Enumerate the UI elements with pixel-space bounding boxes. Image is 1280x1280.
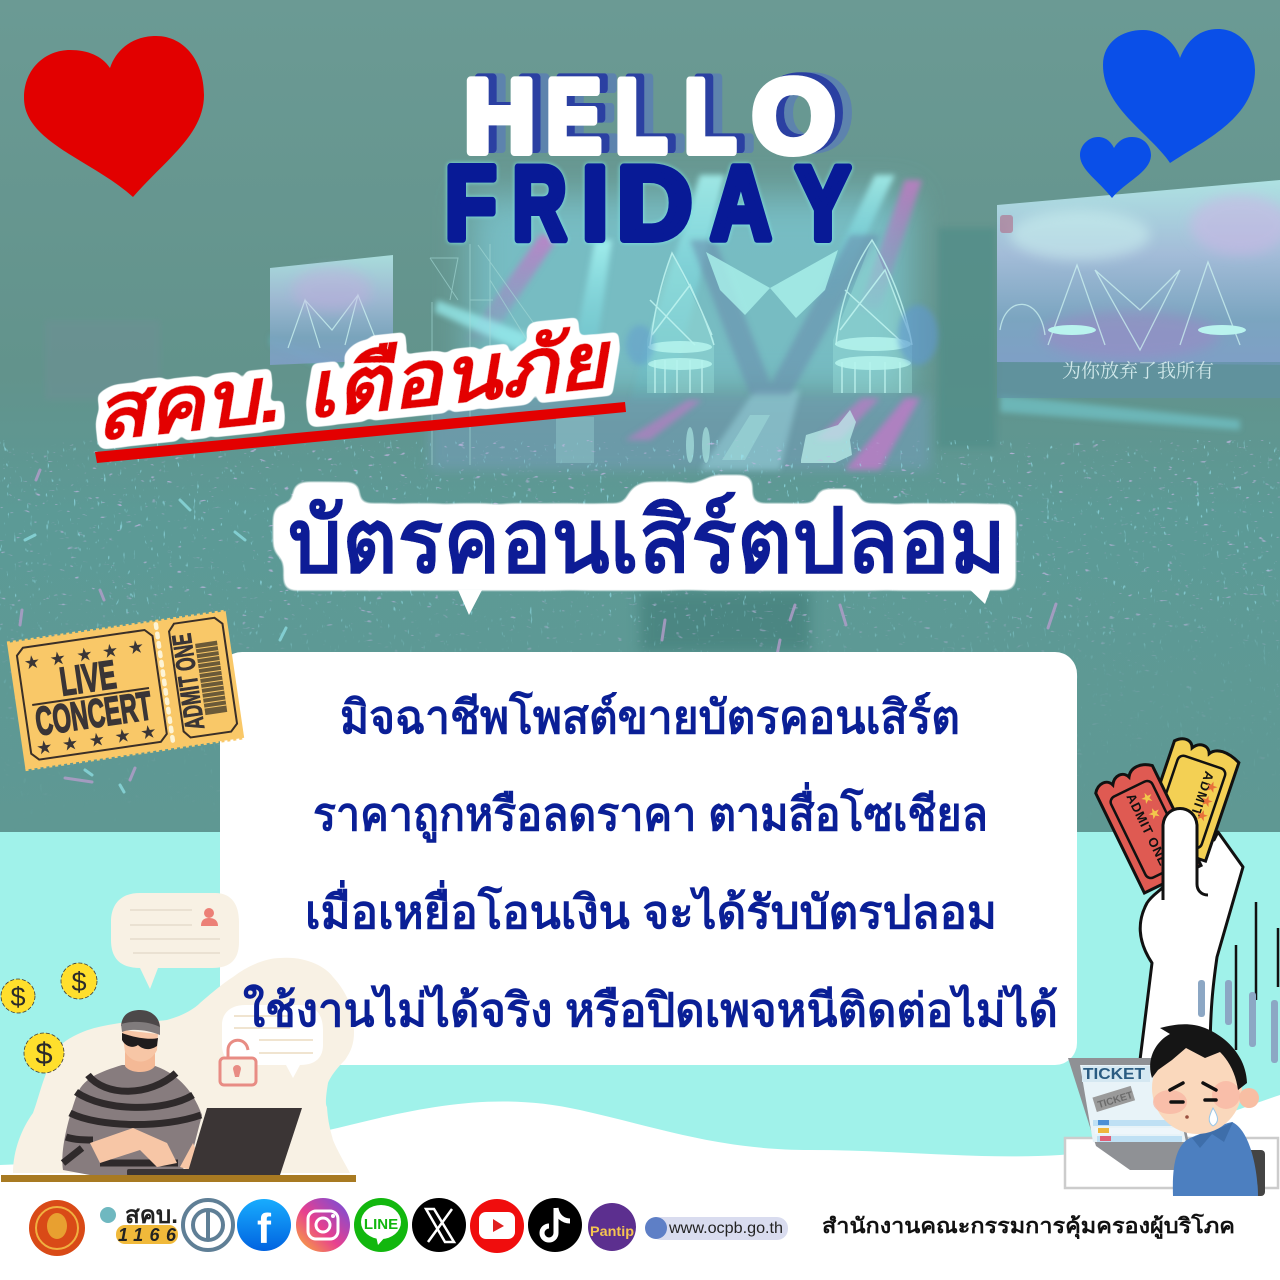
illustration: sad person with ticket laptop — [1065, 1024, 1278, 1196]
icon: live concert ticket: CONCERT — [33, 684, 155, 744]
dark column right of stage — [938, 228, 996, 448]
face — [122, 1030, 158, 1062]
icon: live concert ticket: ★ — [140, 724, 157, 743]
stage light beams — [270, 175, 1240, 470]
HELLO far shadow: E — [563, 55, 618, 171]
icon: facebook: f — [257, 1205, 272, 1252]
HELLO letters: E — [546, 58, 601, 174]
HELLO near shadow: E — [554, 55, 609, 171]
HELLO near shadow: L — [692, 56, 744, 172]
logo: hotline: 1166 — [118, 1225, 177, 1245]
HELLO near shadow: H — [472, 56, 543, 172]
icon: facebook — [237, 1199, 291, 1252]
drip bars — [1198, 980, 1278, 1063]
speech bubble: white — [222, 1005, 323, 1078]
FRIDAY letters: D — [617, 146, 692, 262]
logo: OCPB ring — [183, 1200, 233, 1250]
FRIDAY letters: A — [710, 146, 771, 262]
icon: live concert ticket: ★ — [76, 646, 93, 665]
icon: dollar coins: $ — [35, 1036, 53, 1071]
icon: live concert ticket: ★ — [102, 642, 119, 661]
panel: concert photo background — [0, 0, 1280, 832]
heading: บัตรคอนเสิร์ตปลอม: บัตรคอนเสิร์ตปลอม — [288, 491, 1006, 592]
illustration: thief at laptop — [1, 893, 356, 1182]
laptop: TICKET — [1083, 1066, 1145, 1083]
panel: main message card — [220, 652, 1077, 1065]
website pill — [645, 1217, 788, 1240]
yellow ticket: ADMIT — [1188, 769, 1217, 818]
stage blue blob accent — [898, 305, 938, 365]
icon: pantip — [588, 1203, 636, 1251]
illustration: hand holding tickets — [1093, 736, 1278, 1063]
icon: live concert ticket: ★ — [88, 731, 106, 750]
HELLO letters: O — [752, 58, 835, 175]
HELLO near shadow: L — [623, 56, 675, 172]
icon: live concert ticket: ADMIT ONE — [167, 632, 210, 732]
red ticket: ★ — [1146, 805, 1163, 822]
falling lines — [1236, 902, 1278, 1050]
FRIDAY letters: F — [445, 146, 496, 262]
speech bubble: user card — [111, 893, 239, 989]
HELLO letters: L — [684, 59, 736, 175]
beanie — [121, 1010, 160, 1028]
faint upper-left stage panel — [45, 320, 160, 400]
footer: logos row — [29, 1198, 788, 1256]
yellow ticket — [1141, 736, 1241, 861]
right big screen — [997, 180, 1280, 398]
HELLO far shadow: L — [632, 56, 684, 172]
line 3: เมื่อเหยื่อโอนเงิน จะได้รับบัตรปลอม — [305, 880, 997, 938]
red underline — [95, 402, 626, 463]
icon: live concert ticket: ★ — [36, 739, 53, 758]
crowd sparkle — [0, 440, 1280, 759]
right screen lyric caption: 为你放弃了我所有 — [1062, 356, 1214, 383]
HELLO far shadow: O — [769, 55, 852, 172]
icon: live concert ticket: ★ — [114, 727, 131, 746]
icon: dollar coins: $ — [71, 967, 87, 997]
main message text — [243, 690, 1058, 1036]
arm — [90, 1128, 177, 1167]
icon: open padlock — [220, 1040, 256, 1085]
hair — [1150, 1024, 1247, 1090]
HELLO letters — [464, 58, 835, 175]
piano — [801, 410, 856, 463]
laptop — [1068, 1058, 1195, 1170]
HELLO letters: L — [615, 59, 667, 175]
icon: blue hearts — [1080, 29, 1255, 198]
HELLO near shadow: O — [760, 55, 843, 172]
stage floor props: cage, performers, stairs — [556, 415, 770, 463]
website pill: www.ocpb.go.th — [668, 1220, 783, 1237]
icon: live concert ticket: ★ — [127, 638, 145, 657]
dark crowd silhouettes — [640, 590, 810, 652]
footer: agency name: สำนักงานคณะกรรมการคุ้มครองผู้บริโภค — [822, 1213, 1235, 1240]
logo: hotline: สคบ. — [125, 1202, 178, 1229]
stage disc lights — [648, 337, 911, 370]
FRIDAY letters: R — [512, 146, 567, 262]
icon: youtube — [470, 1199, 524, 1253]
cheeks — [1153, 1090, 1187, 1114]
desk — [1065, 1138, 1278, 1188]
yellow ticket: ★ — [1199, 793, 1215, 810]
FRIDAY letters: Y — [796, 145, 850, 261]
logo: government emblem — [29, 1200, 85, 1256]
FRIDAY letters — [445, 144, 850, 262]
red ticket: ★ — [1139, 789, 1156, 807]
logo: hotline — [100, 1202, 178, 1245]
stage dark V pillars — [690, 235, 880, 395]
head — [1152, 1042, 1242, 1134]
neck — [125, 1048, 155, 1072]
red ticket — [1093, 760, 1201, 893]
icon: red heart — [24, 36, 204, 197]
white finger — [1163, 808, 1208, 900]
stage lattice set pieces — [647, 240, 912, 393]
left big screen — [270, 255, 393, 365]
icon: live concert ticket: ★ — [62, 735, 79, 754]
HELLO far shadow — [481, 55, 852, 172]
HELLO far shadow: H — [481, 56, 552, 172]
line 1: มิจฉาชีพโพสต์ขายบัตรคอนเสิร์ต — [340, 690, 960, 743]
icon: pantip: Pantip — [590, 1223, 634, 1239]
icon: tiktok — [528, 1198, 582, 1252]
red ticket: ADMIT ONE — [1123, 791, 1171, 868]
white hand palm — [1140, 832, 1243, 1060]
HELLO letters: H — [464, 59, 535, 175]
icon: live concert ticket: ★ — [24, 654, 41, 673]
chair back — [1245, 1150, 1265, 1196]
icon: dollar coins — [1, 963, 97, 1073]
shirt — [1173, 1122, 1258, 1196]
icon: instagram — [296, 1198, 350, 1252]
icon: live concert ticket — [7, 611, 244, 770]
yellow ticket: ★ — [1204, 779, 1220, 796]
heading: สคบ. เตือนภัย warning: สคบ. เตือนภัย — [90, 315, 618, 457]
thief body — [62, 1010, 202, 1175]
stage glow — [430, 195, 930, 470]
line 4: ใช้งานไม่ได้จริง หรือปิดเพจหนีติดต่อไม่ได้ — [243, 983, 1058, 1036]
title: HELLO FRIDAY — [445, 55, 852, 262]
HELLO far shadow: L — [701, 56, 753, 172]
icon: X — [412, 1198, 466, 1252]
laptop — [127, 1108, 302, 1176]
panel: aqua lower band with white wave — [0, 832, 1280, 1280]
icon: live concert ticket: LIVE — [57, 653, 119, 704]
line 2: ราคาถูกหรือลดราคา ตามสื่อโซเชียล — [313, 782, 988, 843]
icon: dollar coins: $ — [10, 982, 26, 1012]
tear — [1209, 1108, 1218, 1126]
desk — [1, 1175, 356, 1182]
icon: line: LINE — [364, 1216, 398, 1233]
yellow ticket: ★ — [1194, 807, 1210, 824]
icon: live concert ticket: ★ — [49, 650, 67, 669]
FRIDAY letters: I — [582, 144, 608, 261]
lower crowd glow sticks — [20, 470, 1060, 792]
HELLO near shadow — [472, 55, 843, 172]
eyes and brows — [1170, 1083, 1216, 1102]
beige blob — [13, 958, 354, 1173]
truss lines left of stage — [430, 244, 535, 465]
stage butterfly screen — [706, 250, 838, 318]
mask — [122, 1033, 158, 1049]
icon: line — [354, 1198, 408, 1252]
laptop: TICKET — [1096, 1090, 1134, 1111]
